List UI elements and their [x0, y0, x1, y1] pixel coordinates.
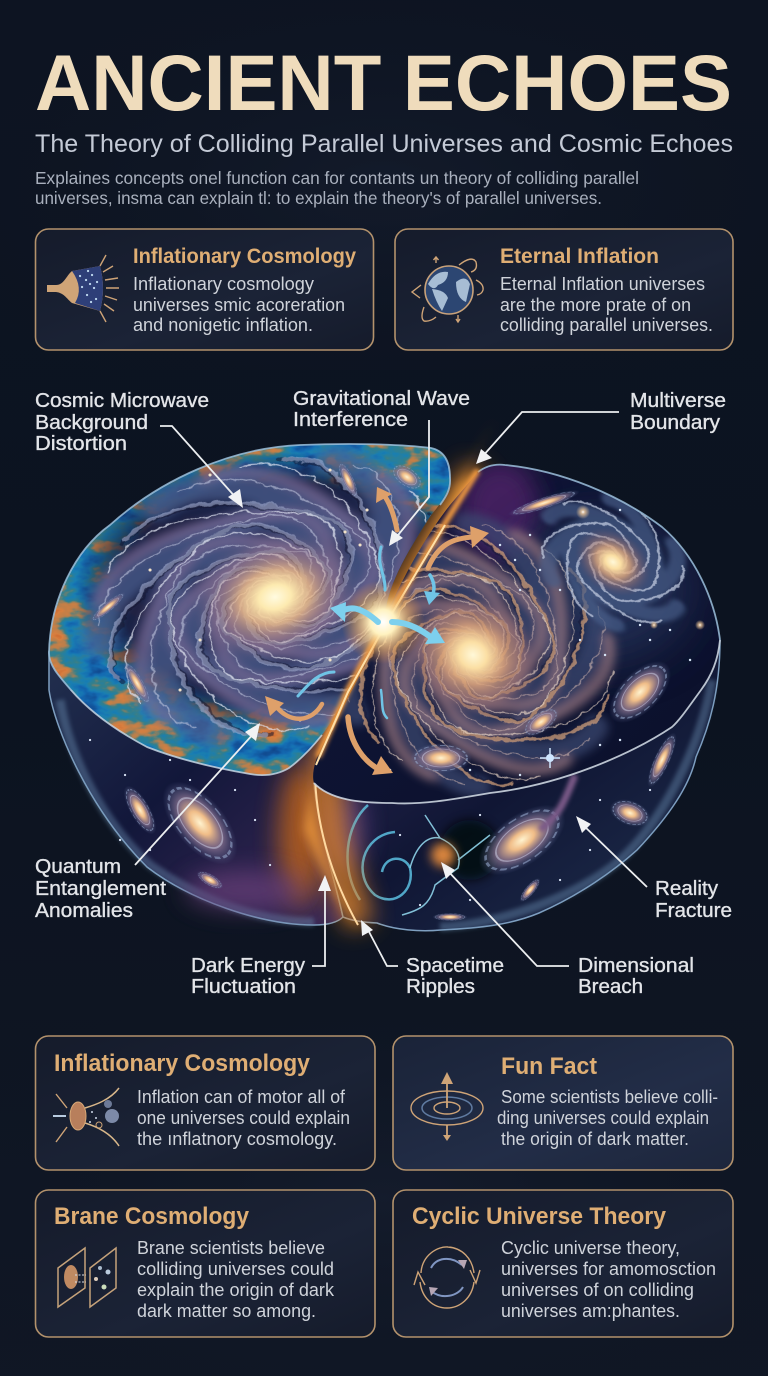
icon: ripple with axis: [411, 1072, 483, 1141]
label: reality fracture: Reality: [655, 878, 718, 900]
body text: [501, 1238, 716, 1321]
body text: Cyclic universe theory,: [501, 1238, 680, 1258]
subtitle: The Theory of Colliding Parallel Universes and Cosmic Echoes: [35, 130, 733, 158]
body text: are the more prate of on: [500, 295, 691, 315]
cyan and orange flow arrows: [265, 487, 489, 775]
icon: cycle arrows: [414, 1247, 480, 1308]
intro paragraph: Explaines concepts onel function can for contants un theory of colliding parallel: [35, 168, 639, 188]
left lower hemisphere: [49, 653, 348, 925]
panel: brane cosmology: [36, 1190, 375, 1337]
intro paragraph: universes, insma can explain tl: to explain the theory's of parallel universes.: [35, 188, 602, 208]
body text: Eternal Inflation universes: [500, 274, 705, 294]
body text: Some scientists believe colli-: [501, 1087, 718, 1107]
body text: Inflationary cosmology: [133, 274, 314, 294]
label: dark energy fluctuation: [191, 875, 331, 998]
icon: inflating funnel: [47, 255, 119, 322]
label: multiverse boundary: Boundary: [630, 412, 720, 434]
label: quantum entanglement anomalies: Quantum: [35, 856, 121, 878]
body text: explain the origin of dark: [137, 1280, 335, 1300]
label: dark energy fluctuation: Fluctuation: [191, 976, 296, 998]
diagram: colliding universes bowl: [48, 443, 721, 944]
body text: the ınflatnory cosmology.: [137, 1129, 337, 1149]
heading: Cyclic Universe Theory: [412, 1203, 667, 1230]
body text: [500, 274, 713, 335]
label: cosmic microwave background distortion: Cosmic Microwave: [35, 390, 209, 412]
spiral galaxy right: [340, 510, 622, 797]
panel: fun fact: [393, 1036, 733, 1170]
label: reality fracture: Fracture: [655, 900, 732, 922]
label: spacetime ripples: [361, 920, 504, 998]
label: quantum entanglement anomalies: [35, 723, 260, 922]
body text: colliding parallel universes.: [500, 315, 713, 335]
body text: universes for amomosction: [501, 1259, 716, 1279]
label: spacetime ripples: Ripples: [406, 976, 475, 998]
label: gravitational wave interference: Interference: [293, 409, 408, 431]
label: multiverse boundary: Multiverse: [630, 390, 726, 412]
icon: expanding horn: [53, 1088, 119, 1146]
body text: [137, 1087, 350, 1149]
body text: dark matter so among.: [137, 1301, 316, 1321]
body text: [137, 1238, 335, 1321]
panel: inflationary cosmology bottom: [36, 1036, 375, 1170]
label: dimensional breach: Dimensional: [578, 955, 694, 977]
body text: the origin of dark matter.: [501, 1129, 689, 1149]
label: cosmic microwave background distortion: Background: [35, 412, 148, 434]
body text: and nonigetic inflation.: [133, 315, 313, 335]
heading: Eternal Inflation: [500, 244, 659, 268]
heading: Fun Fact: [501, 1053, 597, 1080]
collision flash: [316, 470, 478, 765]
body text: one universes could explain: [137, 1108, 350, 1128]
heading: Brane Cosmology: [54, 1203, 250, 1230]
label: multiverse boundary: [476, 390, 726, 464]
body text: Inflation can of motor all of: [137, 1087, 346, 1107]
label: quantum entanglement anomalies: Anomalies: [35, 900, 133, 922]
heading: Inflationary Cosmology: [133, 244, 356, 268]
label: reality fracture: [576, 816, 732, 922]
rim highlights: [49, 444, 720, 803]
intro paragraph: [35, 168, 639, 208]
surface: right universe: [313, 466, 720, 802]
lower nebula glows: [60, 680, 712, 927]
body text: universes of on colliding: [501, 1280, 694, 1300]
body text: ding universes could explain: [497, 1108, 709, 1128]
panel: eternal inflation: [395, 229, 733, 350]
label: dimensional breach: [441, 862, 694, 998]
icon: two branes: [58, 1248, 116, 1307]
label: dark energy fluctuation: Dark Energy: [191, 955, 305, 977]
title: ANCIENT ECHOES: [35, 38, 732, 127]
icon: globe with orbits: [412, 257, 483, 322]
label: dimensional breach: Breach: [578, 976, 643, 998]
body text: [497, 1087, 718, 1149]
crack glow: [304, 420, 495, 930]
label: cosmic microwave background distortion: Distortion: [35, 433, 127, 455]
label: spacetime ripples: Spacetime: [406, 955, 504, 977]
panel: inflationary cosmology top: [36, 229, 374, 350]
right lower hemisphere: [314, 640, 720, 931]
panel: cyclic universe theory: [393, 1190, 733, 1337]
body text: colliding universes could: [137, 1259, 334, 1279]
spiral galaxy left: [79, 445, 432, 748]
body text: universes smic acoreration: [133, 295, 345, 315]
body text: universes am:phantes.: [501, 1301, 680, 1321]
label: cosmic microwave background distortion: [35, 390, 243, 508]
surface: cosmic microwave background universe: [49, 444, 450, 775]
heading: Inflationary Cosmology: [54, 1050, 311, 1077]
label: quantum entanglement anomalies: Entanglement: [35, 878, 166, 900]
spiral galaxy upper right: [539, 492, 688, 634]
label: gravitational wave interference: [293, 388, 470, 546]
label: gravitational wave interference: Gravitational Wave: [293, 388, 470, 410]
body text: [133, 274, 345, 335]
body text: Brane scientists believe: [137, 1238, 325, 1258]
